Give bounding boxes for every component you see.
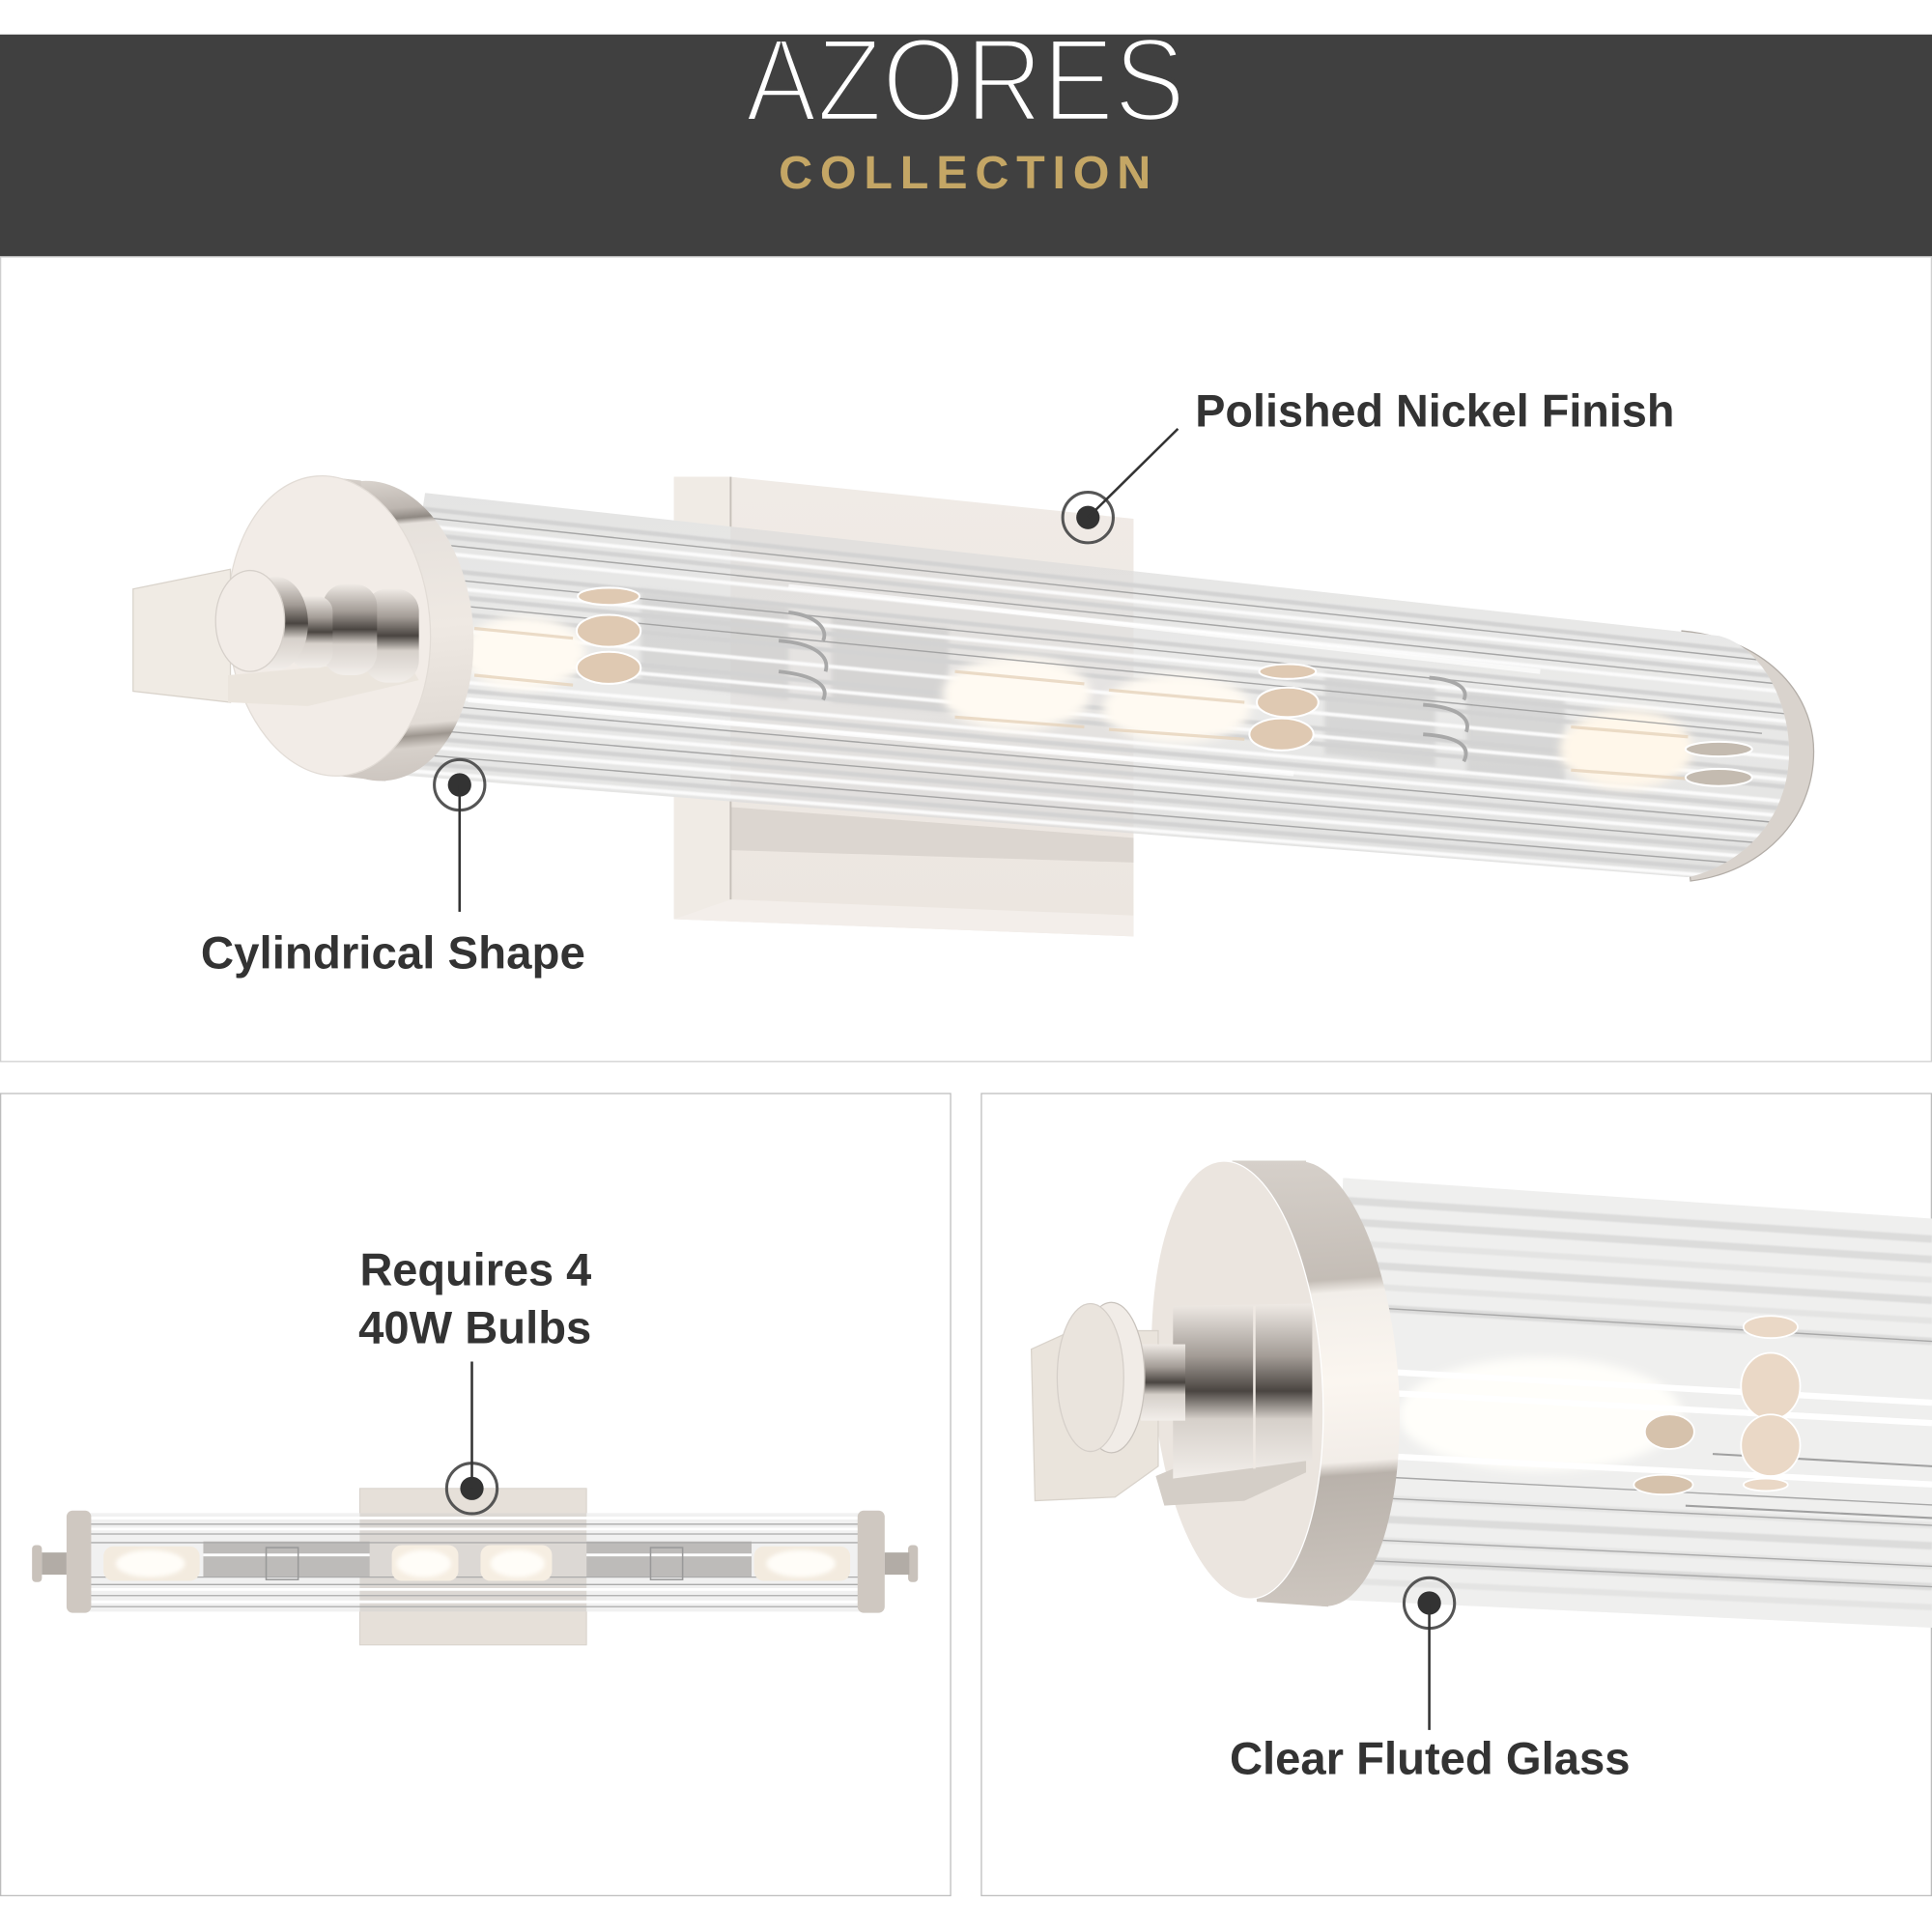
mounting arm and knob [133,569,419,706]
bulb glow [462,616,1693,788]
panel: main fixture view [1,257,1931,1062]
title: AZORES: AZORES [746,14,1185,146]
backplate [674,477,1133,936]
detail fluted glass [1319,1171,1932,1638]
detail disc [1137,1155,1414,1612]
detail socket spots [1634,1316,1801,1494]
detail bulb glow [1343,1358,1932,1485]
chrome clips [779,612,1467,761]
inner chrome rods [640,589,1565,783]
small backplate [359,1489,586,1645]
callout: requires 4 40W bulbs: 40W Bulbs [358,1302,591,1353]
panel: front view [1,1094,951,1895]
header band [0,14,1932,256]
callout: cylindrical shape: Cylindrical Shape [201,928,585,980]
small fluted tube [89,1513,860,1611]
callout: polished nickel finish [1063,385,1674,543]
small end caps [32,1511,918,1613]
bulb socket spots [577,587,1752,786]
panel: detail view [981,1094,1932,1895]
subtitle: COLLECTION: COLLECTION [779,147,1151,199]
callout: clear fluted glass: Clear Fluted Glass [1230,1734,1630,1785]
flute bands [407,507,1799,884]
callout: clear fluted glass [1230,1577,1631,1785]
fluted glass tube [407,493,1789,877]
end disc [215,468,486,789]
detail arm and knob [1032,1302,1312,1506]
callout: requires 4 40W bulbs: Requires 4 [359,1244,591,1295]
callout: cylindrical shape [201,759,585,980]
end cap ring [1676,631,1814,881]
callout: polished nickel finish: Polished Nickel Finish [1195,385,1674,437]
callout: requires 4 40W bulbs [358,1244,591,1514]
small bulbs [103,1545,850,1580]
